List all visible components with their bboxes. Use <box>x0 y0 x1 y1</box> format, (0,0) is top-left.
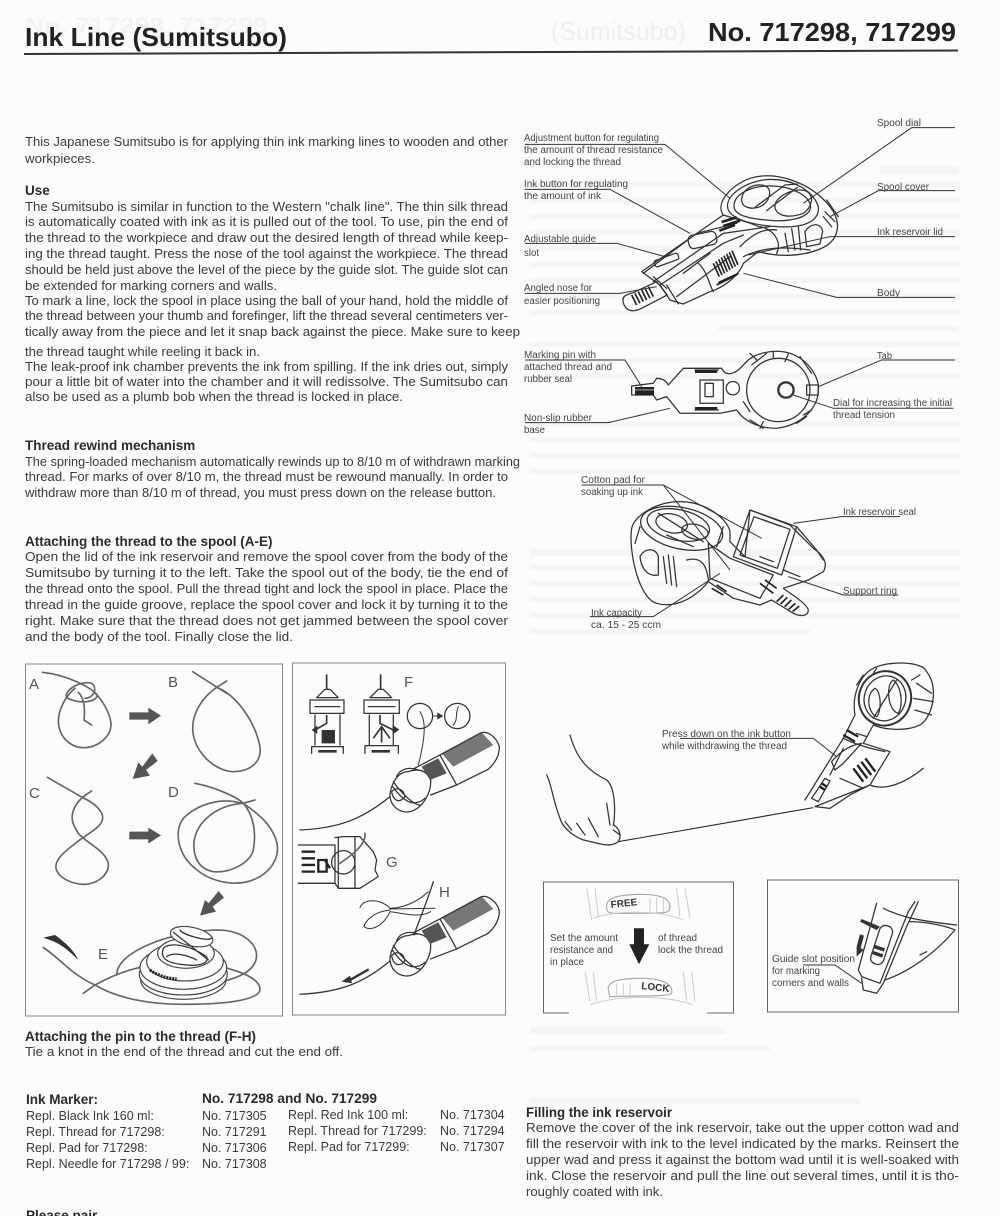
intro text block: This Japanese Sumitsubo is for applying thin ink marking lines to wooden and other <box>25 135 508 149</box>
section: attaching the thread to the spool: and the body of the tool. Finally close the lid. <box>25 630 293 644</box>
section: filling the ink reservoir: Filling the ink reservoir <box>526 1105 673 1120</box>
label: press down on the ink button: while withdrawing the thread <box>661 741 787 752</box>
label: tab: Tab <box>877 351 892 362</box>
parts table: No. 717305 <box>202 1109 267 1123</box>
section: thread rewind mechanism: thread. For marks of over 8/10 m, the thread must be rewound manually. In order to <box>25 470 508 484</box>
diagram: tool top view with labels <box>524 118 955 311</box>
letters A-E <box>29 674 179 963</box>
caption: for marking <box>772 966 820 977</box>
header rule <box>24 50 958 54</box>
section: use: tically away from the piece and let it snap back against the piece. Make sure to keep <box>25 325 520 339</box>
label: marking pin: Marking pin with <box>524 350 596 361</box>
section: attaching the thread to the spool: the thread onto the spool. Pull the thread tight and lock the spool in place. Place the <box>25 582 508 596</box>
parts table: No. 717304 <box>440 1108 505 1122</box>
label: guide slot <box>524 234 596 259</box>
tool held in hand <box>805 663 933 808</box>
panel: free / lock dial <box>544 882 734 1013</box>
label: ink button: the amount of ink <box>524 191 602 202</box>
label: ink capacity: Ink capacity <box>591 608 642 619</box>
section: filling the ink reservoir: roughly coated with ink. <box>526 1185 663 1199</box>
panel: guide slot position <box>768 880 958 1012</box>
label: angled nose: Angled nose for <box>524 283 593 294</box>
illustration: hands withdrawing the thread <box>547 663 933 845</box>
section: filling the ink reservoir: Remove the cover of the ink reservoir, take out the upper cotton wad and <box>526 1121 959 1135</box>
block arrows <box>129 708 224 916</box>
section: thread rewind mechanism: Thread rewind mechanism <box>25 438 195 453</box>
caption left: Set the amount <box>550 933 618 944</box>
thread line <box>618 808 813 842</box>
panel: free / lock dial: LOCK <box>641 981 671 995</box>
label: body: Body <box>877 288 900 299</box>
step C figure eight <box>47 777 108 884</box>
section: attaching the pin: Attaching the pin to the thread (F-H) <box>25 1029 256 1044</box>
caption right <box>658 933 723 956</box>
product number: No. 717298, 717299 <box>708 17 956 47</box>
letters A-E: B <box>168 674 178 691</box>
section: use: The Sumitsubo is similar in function to the Western "chalk line". The thin silk thread <box>25 200 508 214</box>
label: cotton pad: Cotton pad for <box>581 475 646 486</box>
section: attaching the thread to the spool: Open the lid of the ink reservoir and remove the spool cover from the body of the <box>25 550 508 564</box>
label: ink reservoir seal: Ink reservoir seal <box>843 507 916 518</box>
label: ink reservoir lid: Ink reservoir lid <box>877 227 943 238</box>
label: angled nose: easier positioning <box>524 296 600 307</box>
label: marking pin <box>524 350 612 385</box>
label: ink button <box>524 179 628 202</box>
section: use: should be held just above the level of the piece by the guide slot. The guide slot can <box>25 263 508 277</box>
label: spool cover: Spool cover <box>877 182 930 193</box>
parts table: No. 717298 and No. 717299 <box>202 1091 377 1106</box>
open tool drawing <box>631 499 825 616</box>
caption: corners and walls <box>772 978 849 989</box>
section: attaching the pin <box>25 1029 343 1059</box>
section: attaching the pin: Tie a knot in the end of the thread and cut the end off. <box>25 1045 343 1059</box>
parts table: No. 717294 <box>440 1124 505 1138</box>
section: use: the thread to the workpiece and draw out the desired length of thread while keep- <box>25 231 508 245</box>
caption left <box>550 933 618 968</box>
parts table: Repl. Pad for 717298: <box>26 1141 148 1155</box>
parts table: Repl. Red Ink 100 ml: <box>288 1108 408 1122</box>
label: press down on the ink button: Press down on the ink button <box>662 729 791 740</box>
show-through title: (Sumitsubo) <box>551 16 686 46</box>
section: attaching the thread to the spool: right. Make sure that the thread does not get jammed between the spool cover <box>25 614 508 628</box>
intro text block: workpieces. <box>24 152 95 166</box>
caption right: of thread <box>658 933 697 944</box>
caption right: lock the thread <box>658 945 723 956</box>
section: thread rewind mechanism: withdraw more than 8/10 m of thread, you must press down on the release button. <box>24 486 496 500</box>
label: dial: thread tension <box>833 410 895 421</box>
parts table: No. 717308 <box>202 1157 267 1171</box>
section: thread rewind mechanism <box>24 438 520 500</box>
letters A-E: A <box>29 676 39 693</box>
panel: free / lock dial: FREE <box>610 897 638 911</box>
letters F-H: H <box>439 884 450 901</box>
label: guide slot: slot <box>524 248 539 259</box>
leader lines for open tool <box>582 485 900 617</box>
parts table <box>26 1091 505 1171</box>
section: use: also be used as a plumb bob when the thread is locked in place. <box>25 390 403 404</box>
label: ink button: Ink button for regulating <box>524 179 628 190</box>
section: filling the ink reservoir: ink. Close the reservoir and pull the line out several times, until it is tho- <box>526 1169 959 1183</box>
leader lines for top view <box>525 128 955 297</box>
step F mechanism <box>310 675 470 765</box>
step A knot <box>42 672 111 748</box>
section: use: pour a little bit of water into the chamber and it will redissolve. The Sumitsubo can <box>25 375 508 389</box>
parts table: Repl. Thread for 717298: <box>26 1125 165 1139</box>
letters F-H: G <box>386 854 398 871</box>
label: ink capacity: ca. 15 - 25 ccm <box>591 620 661 631</box>
caption left: in place <box>550 957 584 968</box>
intro text block <box>24 135 508 166</box>
leader lines for underside <box>525 360 955 423</box>
label: marking pin: attached thread and <box>524 362 612 373</box>
parts table: Ink Marker: <box>26 1092 98 1107</box>
label: press down on the ink button <box>661 729 791 752</box>
label: angled nose <box>524 283 600 307</box>
label: non-slip base <box>524 413 593 436</box>
parts table: Repl. Needle for 717298 / 99: <box>26 1157 189 1171</box>
label: non-slip base: Non-slip rubber <box>524 413 593 424</box>
label: support ring: Support ring <box>843 586 897 597</box>
parts table: No. 717307 <box>440 1140 505 1154</box>
letters F-H: F <box>404 674 413 691</box>
section: filling the ink reservoir: fill the reservoir with ink to the level indicated by the marks. Reinsert the <box>526 1137 959 1151</box>
panel: pin steps F-H <box>292 663 506 1015</box>
section: use: To mark a line, lock the spool in place using the ball of your hand, hold the middle of <box>25 294 509 308</box>
leader <box>680 738 837 757</box>
diagram: open tool with labels <box>581 475 916 631</box>
step F spool <box>300 732 499 830</box>
label: cotton pad: soaking up ink <box>581 487 644 498</box>
down arrow <box>629 928 649 964</box>
section: use: The leak-proof ink chamber prevents the ink from spilling. If the ink dries out, simply <box>25 360 509 374</box>
section: attaching the thread to the spool: thread in the guide groove, replace the spool cover and lock it by turning it to the <box>25 598 508 612</box>
section: filling the ink reservoir <box>526 1105 959 1199</box>
diagram: tool underside with labels <box>524 350 955 436</box>
section: use: be extended for marking corners and walls. <box>25 279 277 293</box>
tool top view drawing <box>623 176 838 311</box>
FREE dial <box>606 894 670 913</box>
section: attaching the thread to the spool: Sumitsubo by turning it to the left. Take the spool out of the body, tie the end of <box>25 566 509 580</box>
section: use: the thread taught while reeling it back in. <box>25 345 260 359</box>
section: attaching the thread to the spool <box>25 534 509 644</box>
label: cotton pad <box>581 475 646 498</box>
parts table: No. 717306 <box>202 1141 267 1155</box>
section: use: the thread between your thumb and forefinger, lift the thread several centimeters ver- <box>25 309 508 323</box>
letters A-E: E <box>98 946 108 963</box>
label: non-slip base: base <box>524 425 545 436</box>
LOCK dial <box>608 978 672 997</box>
tool underside drawing <box>632 351 818 428</box>
parts table: Repl. Thread for 717299: <box>288 1124 427 1138</box>
section: use: ing the thread taught. Press the nose of the tool against the workpiece. The thread <box>25 247 508 261</box>
parts table: Repl. Black Ink 160 ml: <box>26 1109 154 1123</box>
label: adjustment button: the amount of thread resistance <box>524 145 663 156</box>
step G knot detail <box>298 833 378 888</box>
label: adjustment button: Adjustment button for regulating <box>524 133 659 144</box>
label: marking pin: rubber seal <box>524 374 572 385</box>
label: dial: Dial for increasing the initial <box>833 398 952 409</box>
caption left: resistance and <box>550 945 613 956</box>
label: ink capacity <box>591 608 661 631</box>
caption: Guide slot position <box>772 954 855 965</box>
section: thread rewind mechanism: The spring-loaded mechanism automatically rewinds up to 8/10 m of withdrawn marking <box>25 455 520 469</box>
letters F-H <box>386 674 450 901</box>
show-through number: No. 717298, 717299 <box>25 13 268 38</box>
step H scissors and spool <box>300 882 499 994</box>
title: Ink Line (Sumitsubo) <box>25 22 287 52</box>
panel: knot steps A-E <box>26 664 282 1016</box>
section: use <box>25 183 520 404</box>
step B loop <box>193 672 260 772</box>
label: adjustment button <box>524 133 663 168</box>
left hand <box>547 735 620 845</box>
label: adjustment button: and locking the thread <box>524 157 621 168</box>
letters A-E: C <box>29 785 40 802</box>
section: use: is automatically coated with ink as it is pulled out of the tool. To use, pin the end of <box>25 215 509 229</box>
letters A-E: D <box>168 784 179 801</box>
step D double loop <box>178 783 277 883</box>
label: dial <box>833 398 952 421</box>
label: spool dial: Spool dial <box>877 118 921 129</box>
step E spool with thread <box>43 923 260 1004</box>
curved arrow E <box>43 935 78 960</box>
caption <box>772 954 855 989</box>
section: use: Use <box>25 183 50 198</box>
parts table: Repl. Pad for 717299: <box>288 1140 410 1154</box>
label: guide slot: Adjustable guide <box>524 234 596 245</box>
parts table: No. 717291 <box>202 1125 267 1139</box>
section: attaching the thread to the spool: Attaching the thread to the spool (A-E) <box>25 534 272 549</box>
section: filling the ink reservoir: upper wad and press it against the bottom wad until it is well-soaked with <box>526 1153 959 1167</box>
